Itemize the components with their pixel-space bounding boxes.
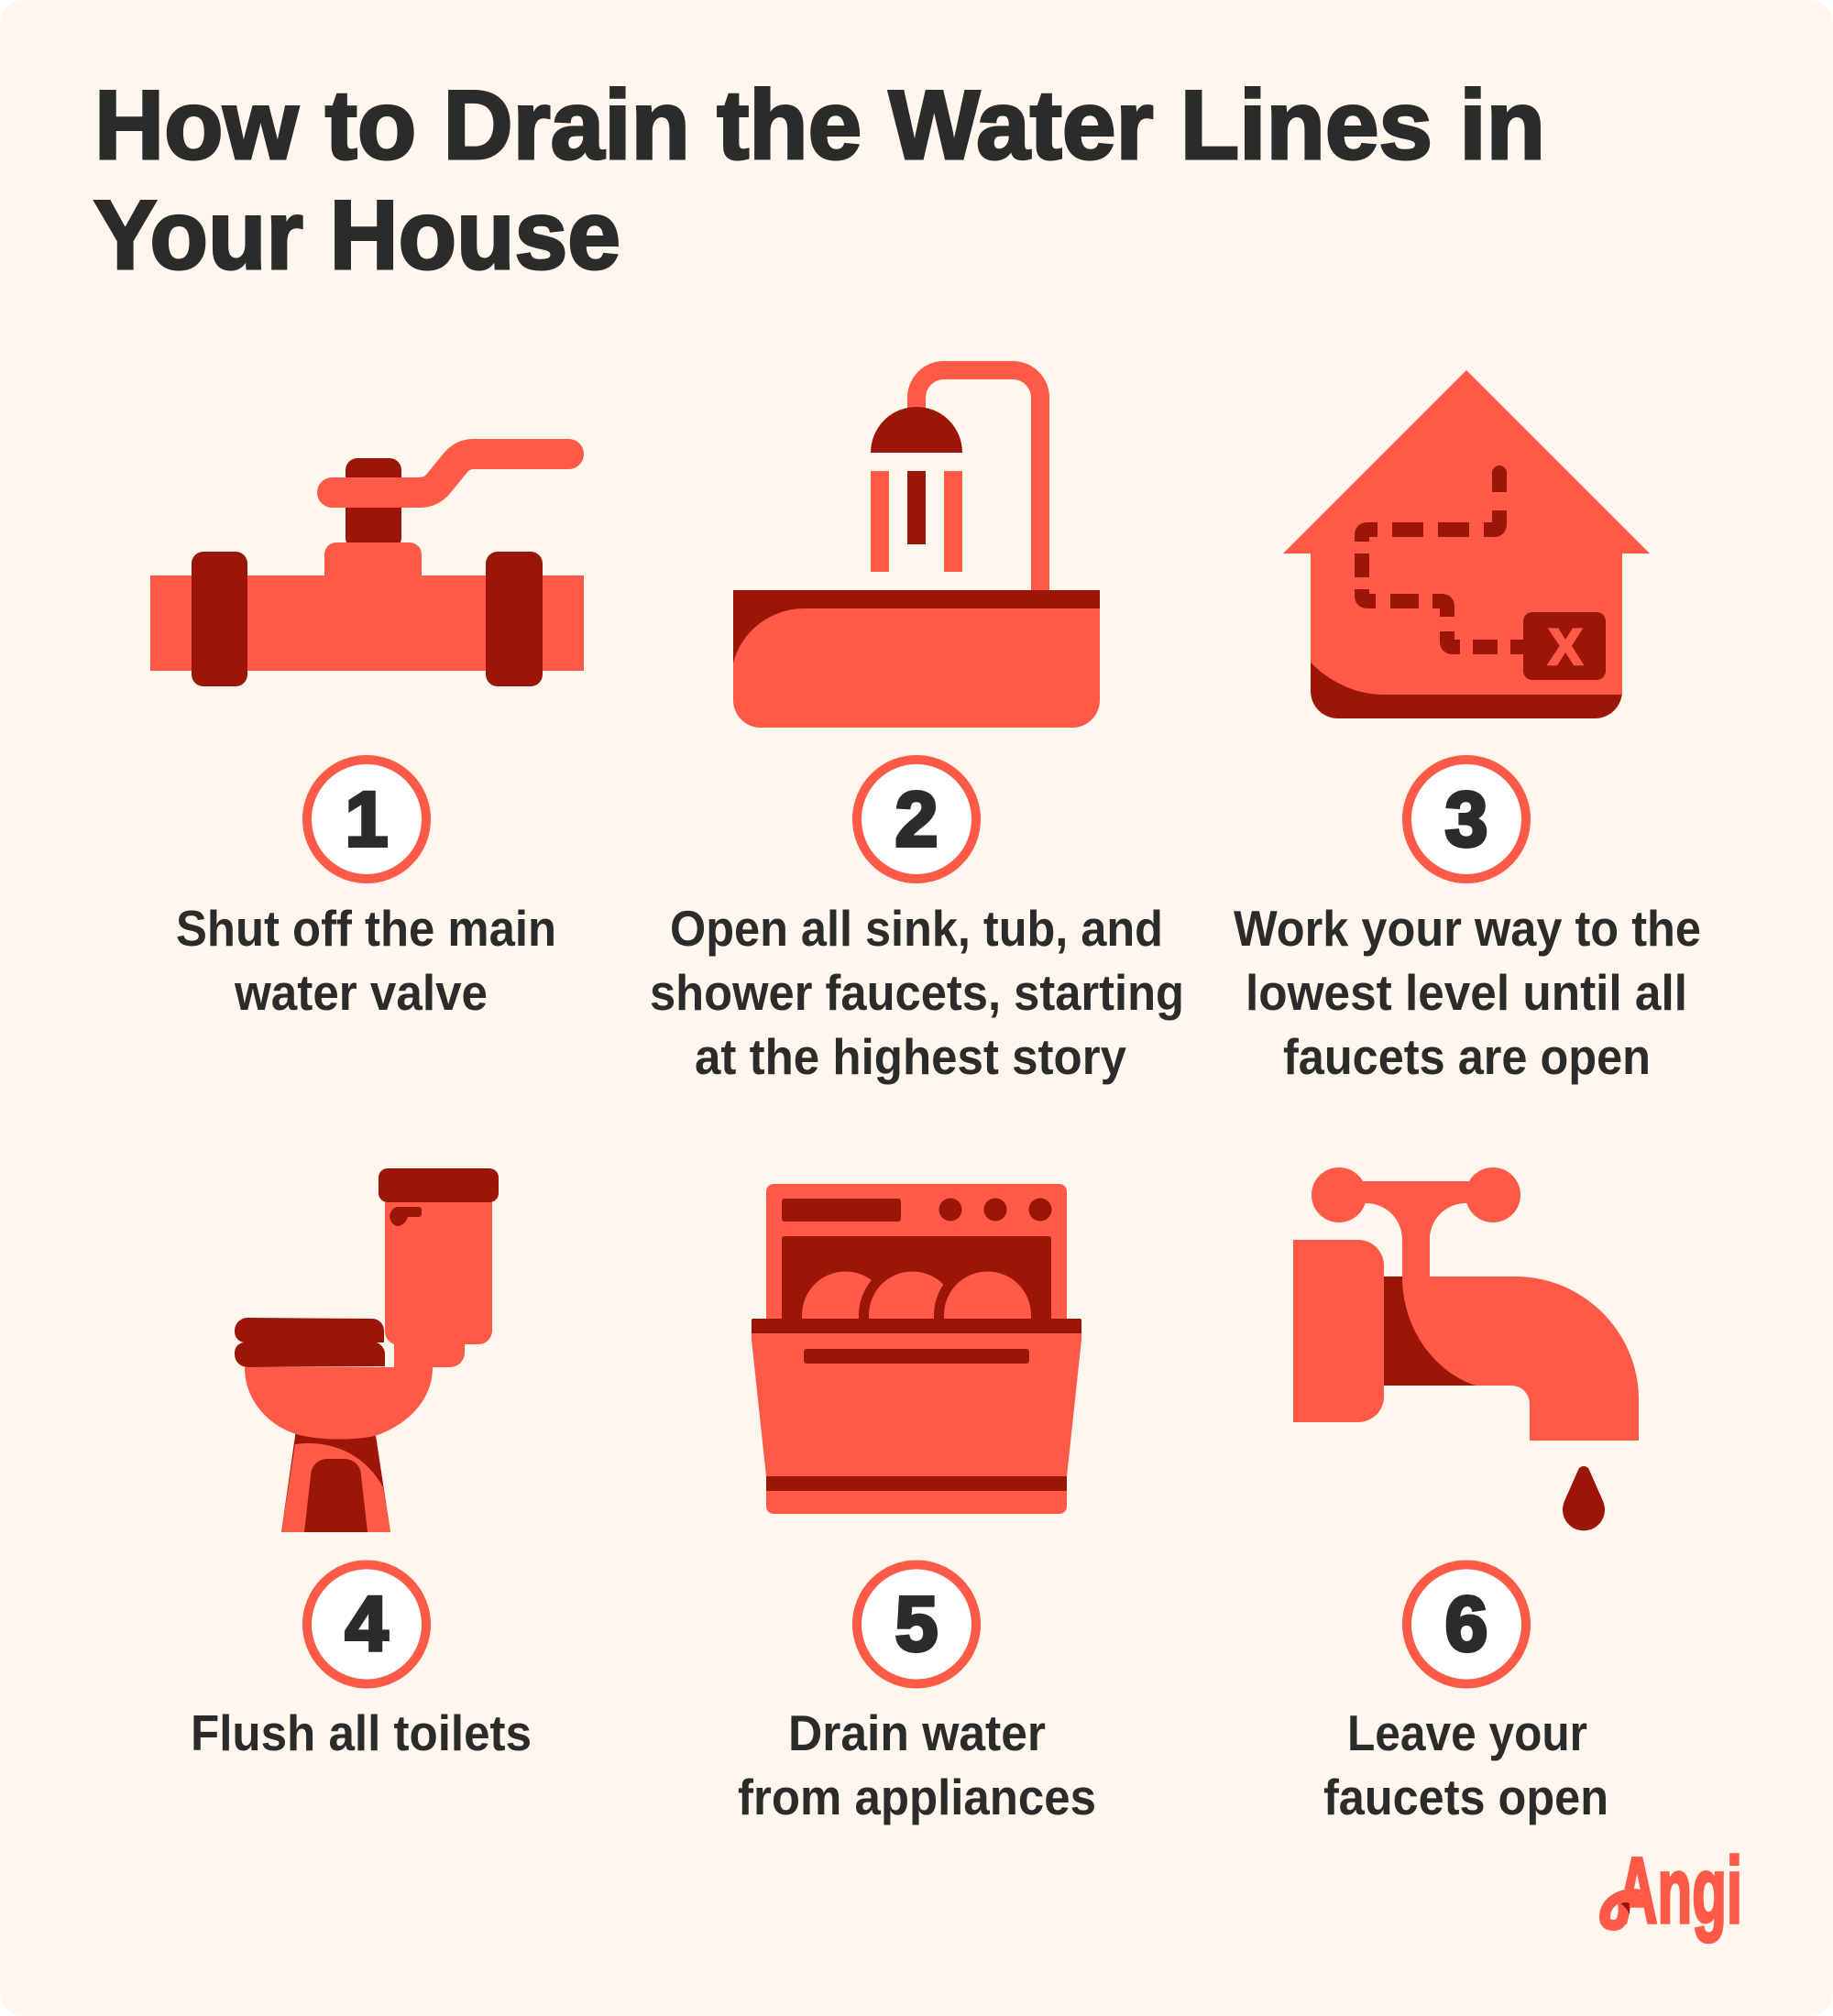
step 2 text: at the highest story: [695, 1028, 1126, 1085]
step number 1: [307, 760, 426, 879]
step 6 text: faucets open: [1323, 1769, 1608, 1825]
step 3 text: Work your way to the: [1234, 900, 1701, 957]
icon: dripping faucet: [1293, 1167, 1639, 1530]
step 6 text: [1323, 1704, 1608, 1825]
step 1 text: Shut off the main: [176, 900, 556, 957]
step 4 text: Flush all toilets: [191, 1704, 532, 1761]
panel: step 6: [1293, 1167, 1639, 1825]
step number 2: [857, 760, 976, 879]
title: How to Drain the Water Lines in: [94, 70, 1545, 180]
icon: shower and tub: [733, 370, 1100, 728]
panel: step 1: [150, 455, 584, 1021]
title: [93, 70, 1545, 290]
step number 5: [857, 1565, 976, 1684]
panel: step 2: [650, 370, 1184, 1085]
step number 4: 4: [346, 1581, 389, 1667]
panel: step 4: [191, 1168, 532, 1761]
logo: Angi: [1605, 1838, 1742, 1943]
step 1 text: water valve: [234, 964, 488, 1021]
step number 6: 6: [1445, 1581, 1487, 1667]
panel: step 5: [738, 1184, 1096, 1825]
step 5 text: from appliances: [738, 1769, 1096, 1825]
logo: Angi: Angi: [1617, 1838, 1742, 1943]
step number 6: [1407, 1565, 1526, 1684]
step number 5: 5: [895, 1581, 938, 1667]
step 6 text: Leave your: [1347, 1704, 1587, 1761]
step number 3: [1407, 760, 1526, 879]
icon: house with pipe map: [1283, 370, 1650, 718]
step number 2: 2: [895, 776, 938, 862]
step number 4: [307, 1565, 426, 1684]
step 5 text: [738, 1704, 1096, 1825]
icon: toilet: [235, 1168, 499, 1532]
panel: step 3: [1234, 370, 1701, 1085]
step number 1: 1: [346, 776, 388, 862]
step 3 text: faucets are open: [1283, 1028, 1651, 1085]
step 1 text: [176, 900, 556, 1021]
title: Your House: [93, 180, 620, 290]
icon: water valve: [150, 455, 584, 686]
step 2 text: [650, 900, 1184, 1085]
icon: x mark: X: [1548, 618, 1583, 675]
step 3 text: lowest level until all: [1246, 964, 1687, 1021]
step 2 text: Open all sink, tub, and: [670, 900, 1163, 957]
step number 3: 3: [1445, 776, 1487, 862]
step 5 text: Drain water: [788, 1704, 1046, 1761]
icon: dishwasher: [752, 1184, 1081, 1514]
step 3 text: [1234, 900, 1701, 1085]
step 2 text: shower faucets, starting: [650, 964, 1184, 1021]
